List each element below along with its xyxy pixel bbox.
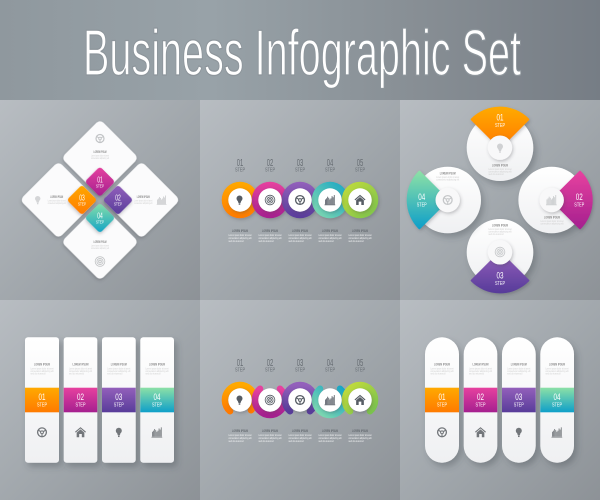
- step labels: 05: [357, 158, 364, 169]
- column 3: Lorem ipsum dolor sit amet: [107, 368, 131, 370]
- text blocks row: Lorem ipsum dolor sit amet: [258, 233, 282, 237]
- step labels: STEP: [295, 368, 305, 374]
- step 03 diamond: [67, 185, 97, 215]
- diamond card right: [103, 161, 180, 239]
- text blocks row: sed do eiusmod: [288, 439, 304, 443]
- text blocks row: LOREM IPSUM: [322, 429, 338, 433]
- step labels: 01: [237, 158, 244, 169]
- step labels: 02: [267, 158, 274, 169]
- text blocks row: LOREM IPSUM: [232, 429, 248, 433]
- circle 1: [222, 182, 258, 218]
- column 4: STEP: [152, 403, 162, 409]
- pill 4: 04: [554, 392, 560, 403]
- text blocks row: consectetur adipiscing elit: [288, 236, 312, 240]
- pill 2: consectetur adipiscing elit: [469, 370, 492, 373]
- icons row: [236, 195, 366, 205]
- inner white discs: [228, 388, 372, 412]
- right circle: [518, 167, 592, 233]
- icon: target: [95, 257, 105, 266]
- circle 4: [312, 182, 348, 218]
- text block left: consectetur adipiscing elit: [48, 202, 66, 205]
- pill 4: consectetur adipiscing elit: [546, 370, 569, 373]
- pill 3: 03: [515, 392, 522, 403]
- ring 2: [255, 389, 285, 415]
- step labels: STEP: [355, 368, 365, 374]
- pill 1: consectetur adipiscing elit: [430, 370, 454, 373]
- text blocks row: LOREM IPSUM: [292, 429, 308, 433]
- left circle: consectetur adipiscing elit: [436, 178, 459, 182]
- step labels: STEP: [325, 168, 335, 174]
- top circle: [467, 108, 533, 181]
- pill 1: [425, 337, 459, 463]
- step labels: STEP: [235, 168, 245, 174]
- pill 3: LOREM IPSUM: [511, 362, 527, 366]
- column 4: 04: [154, 392, 160, 403]
- column 2: Lorem ipsum dolor sit amet: [69, 368, 92, 370]
- text blocks row: consectetur adipiscing elit: [318, 236, 342, 240]
- text blocks row: [228, 429, 372, 443]
- right circle: LOREM IPSUM: [544, 216, 560, 220]
- text block bottom: Lorem ipsum dolor sit amet: [91, 244, 109, 248]
- bottom circle: Lorem ipsum dolor sit amet: [488, 228, 512, 231]
- column 1: consectetur adipiscing elit: [30, 370, 54, 373]
- step labels: STEP: [325, 368, 335, 374]
- column 4: consectetur adipiscing elit: [146, 370, 169, 373]
- pill 4: sed do eiusmod: [546, 372, 561, 376]
- text blocks row: Lorem ipsum dolor sit amet: [288, 433, 312, 437]
- step 04 diamond: STEP: [96, 220, 104, 224]
- pill 1: sed do eiusmod: [430, 372, 446, 376]
- header band: [0, 0, 600, 100]
- column 3: LOREM IPSUM: [111, 362, 127, 366]
- left circle: 04: [418, 192, 425, 203]
- column 1: [25, 337, 59, 463]
- right circle: consectetur adipiscing elit: [540, 222, 564, 226]
- ring 5: [345, 385, 375, 411]
- left circle: [408, 167, 481, 233]
- column 1: LOREM IPSUM: [34, 362, 50, 366]
- icon: gear: [96, 134, 104, 142]
- text blocks row: Lorem ipsum dolor sit amet: [348, 433, 372, 437]
- icon: bulb: [35, 196, 40, 204]
- text blocks row: sed do eiusmod: [318, 239, 334, 243]
- top circle: LOREM IPSUM: [492, 164, 508, 168]
- step labels: STEP: [295, 168, 305, 174]
- text blocks row: consectetur adipiscing elit: [348, 236, 372, 240]
- column 1: 01: [38, 392, 46, 403]
- step 03 diamond: STEP: [78, 202, 86, 206]
- pill 1: LOREM IPSUM: [434, 362, 450, 366]
- text blocks row: LOREM IPSUM: [292, 229, 308, 233]
- column 1: Lorem ipsum dolor sit amet: [30, 368, 54, 370]
- text blocks row: [228, 229, 372, 243]
- text block bottom: consectetur adipiscing elit: [91, 247, 109, 250]
- step labels: STEP: [355, 168, 365, 174]
- column 2: consectetur adipiscing elit: [69, 370, 92, 373]
- bottom circle: 03: [496, 270, 504, 282]
- circle 5: [342, 182, 378, 218]
- diamond card top: [61, 119, 139, 197]
- text blocks row: consectetur adipiscing elit: [258, 236, 282, 240]
- text blocks row: LOREM IPSUM: [262, 229, 278, 233]
- ring 4: [315, 389, 345, 415]
- text block left: [48, 195, 66, 205]
- text block left: LOREM IPSUM: [50, 195, 63, 199]
- column 4: LOREM IPSUM: [149, 362, 165, 366]
- step labels: 03: [297, 158, 304, 169]
- circle 2: [252, 182, 288, 218]
- bottom circle: STEP: [495, 281, 505, 287]
- right circle: STEP: [574, 202, 585, 208]
- icon: chart: [157, 196, 166, 205]
- step 01 diamond: [85, 166, 115, 197]
- text blocks row: LOREM IPSUM: [232, 229, 248, 233]
- column 3: [102, 337, 136, 463]
- text block bottom: LOREM IPSUM: [94, 240, 107, 244]
- panel: five step circles: [200, 100, 400, 300]
- pill 3: [502, 337, 536, 463]
- left circle: LOREM IPSUM: [440, 172, 456, 176]
- right circle: 02: [576, 192, 583, 203]
- step labels: 05: [357, 358, 364, 369]
- ring 1: [225, 385, 255, 411]
- panel: open ring steps: [200, 300, 400, 500]
- text blocks row: sed do eiusmod: [348, 239, 364, 243]
- diamond card left: [20, 161, 97, 239]
- pill 3: STEP: [514, 403, 524, 409]
- step 02 diamond: [103, 185, 133, 215]
- bottom circle: LOREM IPSUM: [492, 224, 508, 228]
- text blocks row: Lorem ipsum dolor sit amet: [228, 233, 252, 237]
- text blocks row: Lorem ipsum dolor sit amet: [288, 233, 312, 237]
- step 01 diamond: 01: [97, 176, 103, 184]
- diamond card bottom: [61, 203, 139, 281]
- text blocks row: Lorem ipsum dolor sit amet: [258, 433, 282, 437]
- text blocks row: sed do eiusmod: [318, 439, 334, 443]
- text blocks row: sed do eiusmod: [288, 239, 304, 243]
- top circle: 01: [496, 112, 504, 124]
- step labels: STEP: [265, 168, 275, 174]
- pill 2: STEP: [476, 403, 486, 409]
- pill 1: STEP: [437, 403, 447, 409]
- column 2: [64, 337, 97, 463]
- pill 3: consectetur adipiscing elit: [507, 370, 531, 373]
- column 1: STEP: [37, 403, 47, 409]
- text block right: consectetur adipiscing elit: [134, 202, 153, 205]
- text block top: LOREM IPSUM: [94, 150, 107, 154]
- text blocks row: Lorem ipsum dolor sit amet: [318, 433, 342, 437]
- step 03 diamond: 03: [79, 194, 85, 202]
- text blocks row: LOREM IPSUM: [322, 229, 338, 233]
- column 2: STEP: [76, 403, 86, 409]
- text block right: Lorem ipsum dolor sit amet: [134, 200, 153, 202]
- panel: four circles with wedges: [400, 100, 600, 300]
- step labels: 02: [267, 358, 274, 369]
- top circle: Lorem ipsum dolor sit amet: [488, 168, 512, 171]
- right circle: Lorem ipsum dolor sit amet: [540, 220, 564, 223]
- pill 3: Lorem ipsum dolor sit amet: [507, 368, 531, 370]
- top circle: consectetur adipiscing elit: [488, 170, 512, 174]
- text block bottom: [91, 240, 109, 250]
- text block top: [91, 150, 109, 160]
- step 02 diamond: 02: [115, 194, 121, 202]
- text block right: LOREM IPSUM: [137, 195, 150, 199]
- column 3: STEP: [114, 403, 124, 409]
- step 04 diamond: [85, 203, 115, 233]
- inner white discs: [228, 188, 372, 212]
- column 4: Lorem ipsum dolor sit amet: [146, 368, 169, 370]
- pill 1: 01: [438, 392, 446, 403]
- column 2: LOREM IPSUM: [72, 362, 89, 366]
- icons row: [236, 395, 366, 405]
- pill 1: Lorem ipsum dolor sit amet: [430, 368, 454, 370]
- step labels: 04: [327, 158, 334, 169]
- panel: pill columns: [400, 300, 600, 500]
- bottom circle: consectetur adipiscing elit: [488, 230, 512, 234]
- column 4: [140, 337, 174, 463]
- text blocks row: consectetur adipiscing elit: [288, 436, 312, 440]
- text blocks row: Lorem ipsum dolor sit amet: [348, 233, 372, 237]
- step labels: 04: [327, 358, 334, 369]
- column 4: sed do eiusmod: [146, 372, 161, 376]
- step 04 diamond: 04: [97, 212, 103, 220]
- text blocks row: LOREM IPSUM: [352, 429, 368, 433]
- panel: diamond infographic: [0, 100, 200, 300]
- column 3: consectetur adipiscing elit: [107, 370, 131, 373]
- pill 2: [464, 337, 497, 463]
- circle 3: [282, 182, 318, 218]
- text blocks row: sed do eiusmod: [258, 239, 274, 243]
- pill 4: LOREM IPSUM: [549, 362, 565, 366]
- pill 4: Lorem ipsum dolor sit amet: [546, 368, 569, 370]
- step labels: STEP: [265, 368, 275, 374]
- step labels: [235, 158, 365, 174]
- text blocks row: consectetur adipiscing elit: [318, 436, 342, 440]
- top circle: sed do eiusmod: [488, 173, 504, 176]
- bottom circle: sed do eiusmod: [488, 233, 504, 236]
- text blocks row: sed do eiusmod: [258, 439, 274, 443]
- left circle: STEP: [417, 202, 427, 208]
- text blocks row: consectetur adipiscing elit: [228, 436, 252, 440]
- column 3: 03: [115, 392, 122, 403]
- text blocks row: consectetur adipiscing elit: [258, 436, 282, 440]
- left circle: Lorem ipsum dolor sit amet: [436, 176, 459, 179]
- step labels: 03: [297, 358, 304, 369]
- panel: square columns: [0, 300, 200, 500]
- ring 3: [285, 385, 315, 411]
- pill 3: sed do eiusmod: [507, 372, 523, 376]
- column 1: sed do eiusmod: [30, 372, 46, 376]
- text blocks row: LOREM IPSUM: [352, 229, 368, 233]
- text block top: consectetur adipiscing elit: [91, 157, 109, 160]
- pill 4: [540, 337, 574, 463]
- pill 2: 02: [477, 392, 484, 403]
- column 2: 02: [77, 392, 84, 403]
- column 2: sed do eiusmod: [69, 372, 85, 376]
- step 02 diamond: STEP: [114, 202, 122, 206]
- step labels: 01: [237, 358, 244, 369]
- text block left: Lorem ipsum dolor sit amet: [48, 200, 66, 202]
- pill 4: STEP: [552, 403, 562, 409]
- text block right: [134, 195, 153, 205]
- step labels: STEP: [235, 368, 245, 374]
- step 01 diamond: STEP: [96, 184, 104, 188]
- pill 2: Lorem ipsum dolor sit amet: [469, 368, 492, 370]
- bottom circle: [467, 219, 533, 292]
- pill 2: sed do eiusmod: [469, 372, 485, 376]
- step labels: [235, 358, 365, 374]
- text blocks row: consectetur adipiscing elit: [228, 236, 252, 240]
- top circle: STEP: [495, 123, 505, 129]
- text block top: Lorem ipsum dolor sit amet: [91, 154, 109, 158]
- text blocks row: sed do eiusmod: [348, 439, 364, 443]
- column 3: sed do eiusmod: [107, 372, 123, 376]
- text blocks row: sed do eiusmod: [228, 239, 244, 243]
- text blocks row: consectetur adipiscing elit: [348, 436, 372, 440]
- text blocks row: sed do eiusmod: [228, 439, 244, 443]
- pill 2: LOREM IPSUM: [472, 362, 489, 366]
- text blocks row: LOREM IPSUM: [262, 429, 278, 433]
- text blocks row: Lorem ipsum dolor sit amet: [228, 433, 252, 437]
- text blocks row: Lorem ipsum dolor sit amet: [318, 233, 342, 237]
